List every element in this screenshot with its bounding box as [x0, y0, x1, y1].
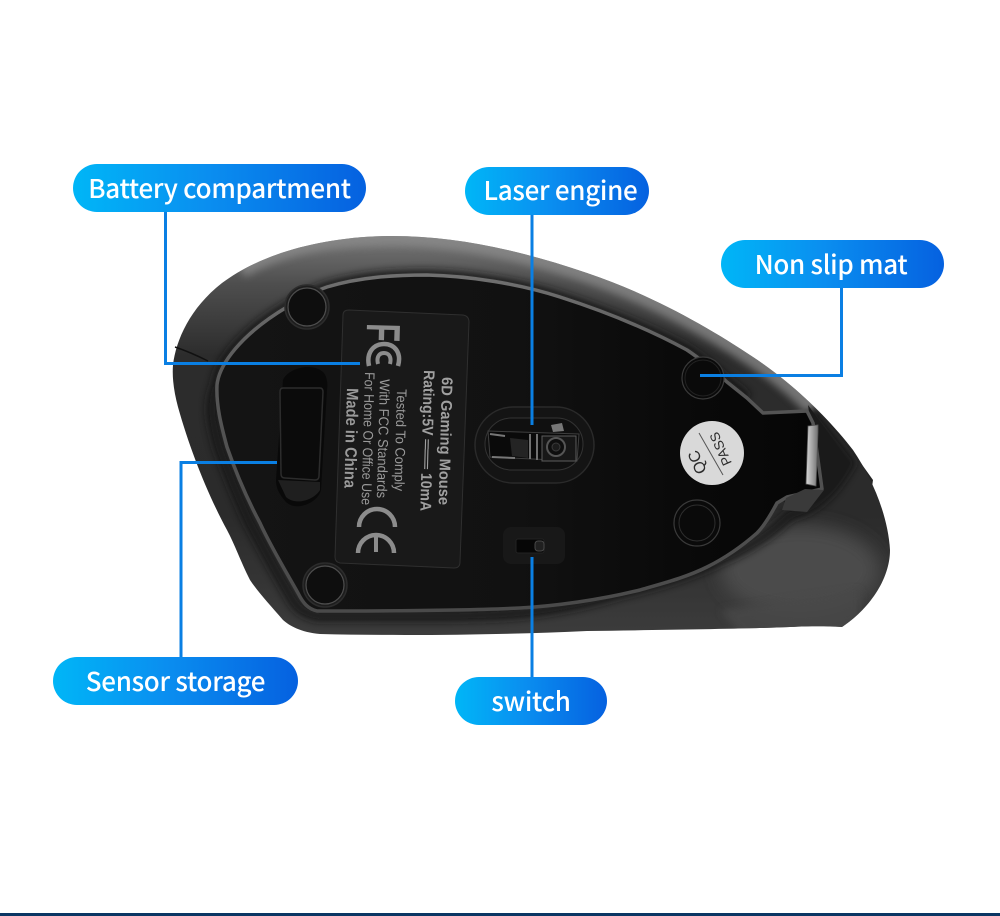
- line: battery compartment: [166, 212, 360, 364]
- side button: [846, 445, 873, 487]
- label text: 6D Gaming Mouse: [435, 377, 455, 506]
- label: switch: switch: [491, 682, 571, 719]
- label text: Tested To Comply: [391, 389, 410, 491]
- QC PASS sticker: QC: [685, 447, 711, 476]
- label text: Rating:5V ═══ 10mA: [416, 370, 437, 511]
- rubber foot top right: [682, 357, 724, 399]
- label: Battery compartment: Battery compartment: [88, 169, 351, 206]
- label text: For Home Or Office Use: [359, 372, 378, 505]
- crescent beside tab: [784, 405, 841, 502]
- bottom facet: [727, 607, 862, 629]
- sensor storage slot: [276, 367, 327, 506]
- label: Sensor storage: [53, 657, 298, 705]
- label text: Made in China: [340, 388, 361, 489]
- bottom bar: [0, 913, 1000, 916]
- label text: With FCC Standards: [374, 379, 393, 498]
- product label sticker: [335, 310, 469, 568]
- power switch: [503, 527, 565, 564]
- QC PASS sticker: PASS: [707, 430, 735, 468]
- line: laser engine: [530, 215, 534, 425]
- label: Laser engine: Laser engine: [484, 171, 637, 208]
- QC PASS sticker: [680, 421, 744, 485]
- mouse underside illustration: [164, 212, 890, 677]
- label: Laser engine: [465, 167, 649, 215]
- top left shell seam: [175, 347, 208, 361]
- laser engine window: [475, 407, 594, 483]
- rubber foot bottom right: [674, 500, 720, 546]
- label text: [340, 370, 455, 511]
- line: sensor storage: [181, 462, 277, 657]
- rubber foot bottom left: [303, 563, 347, 607]
- FCC logo: F: [356, 323, 409, 342]
- base plate: [217, 275, 822, 611]
- label: Battery compartment: [73, 164, 366, 212]
- leader lines: [166, 212, 842, 677]
- line: switch: [530, 557, 534, 677]
- dark band around plate: [212, 275, 850, 616]
- label: Non slip mat: Non slip mat: [755, 245, 907, 282]
- mouse shell: [173, 236, 890, 640]
- line: non slip mat: [700, 288, 842, 376]
- CE mark: [358, 509, 395, 553]
- label: switch: [455, 677, 607, 725]
- label: Non slip mat: [721, 240, 944, 288]
- FCC logo: [356, 323, 409, 366]
- rubber foot top left: [285, 285, 329, 329]
- top edge highlight: [240, 236, 815, 408]
- lower right glow: [720, 525, 880, 615]
- battery door clear tab: [782, 425, 824, 512]
- label: Sensor storage: Sensor storage: [86, 662, 265, 699]
